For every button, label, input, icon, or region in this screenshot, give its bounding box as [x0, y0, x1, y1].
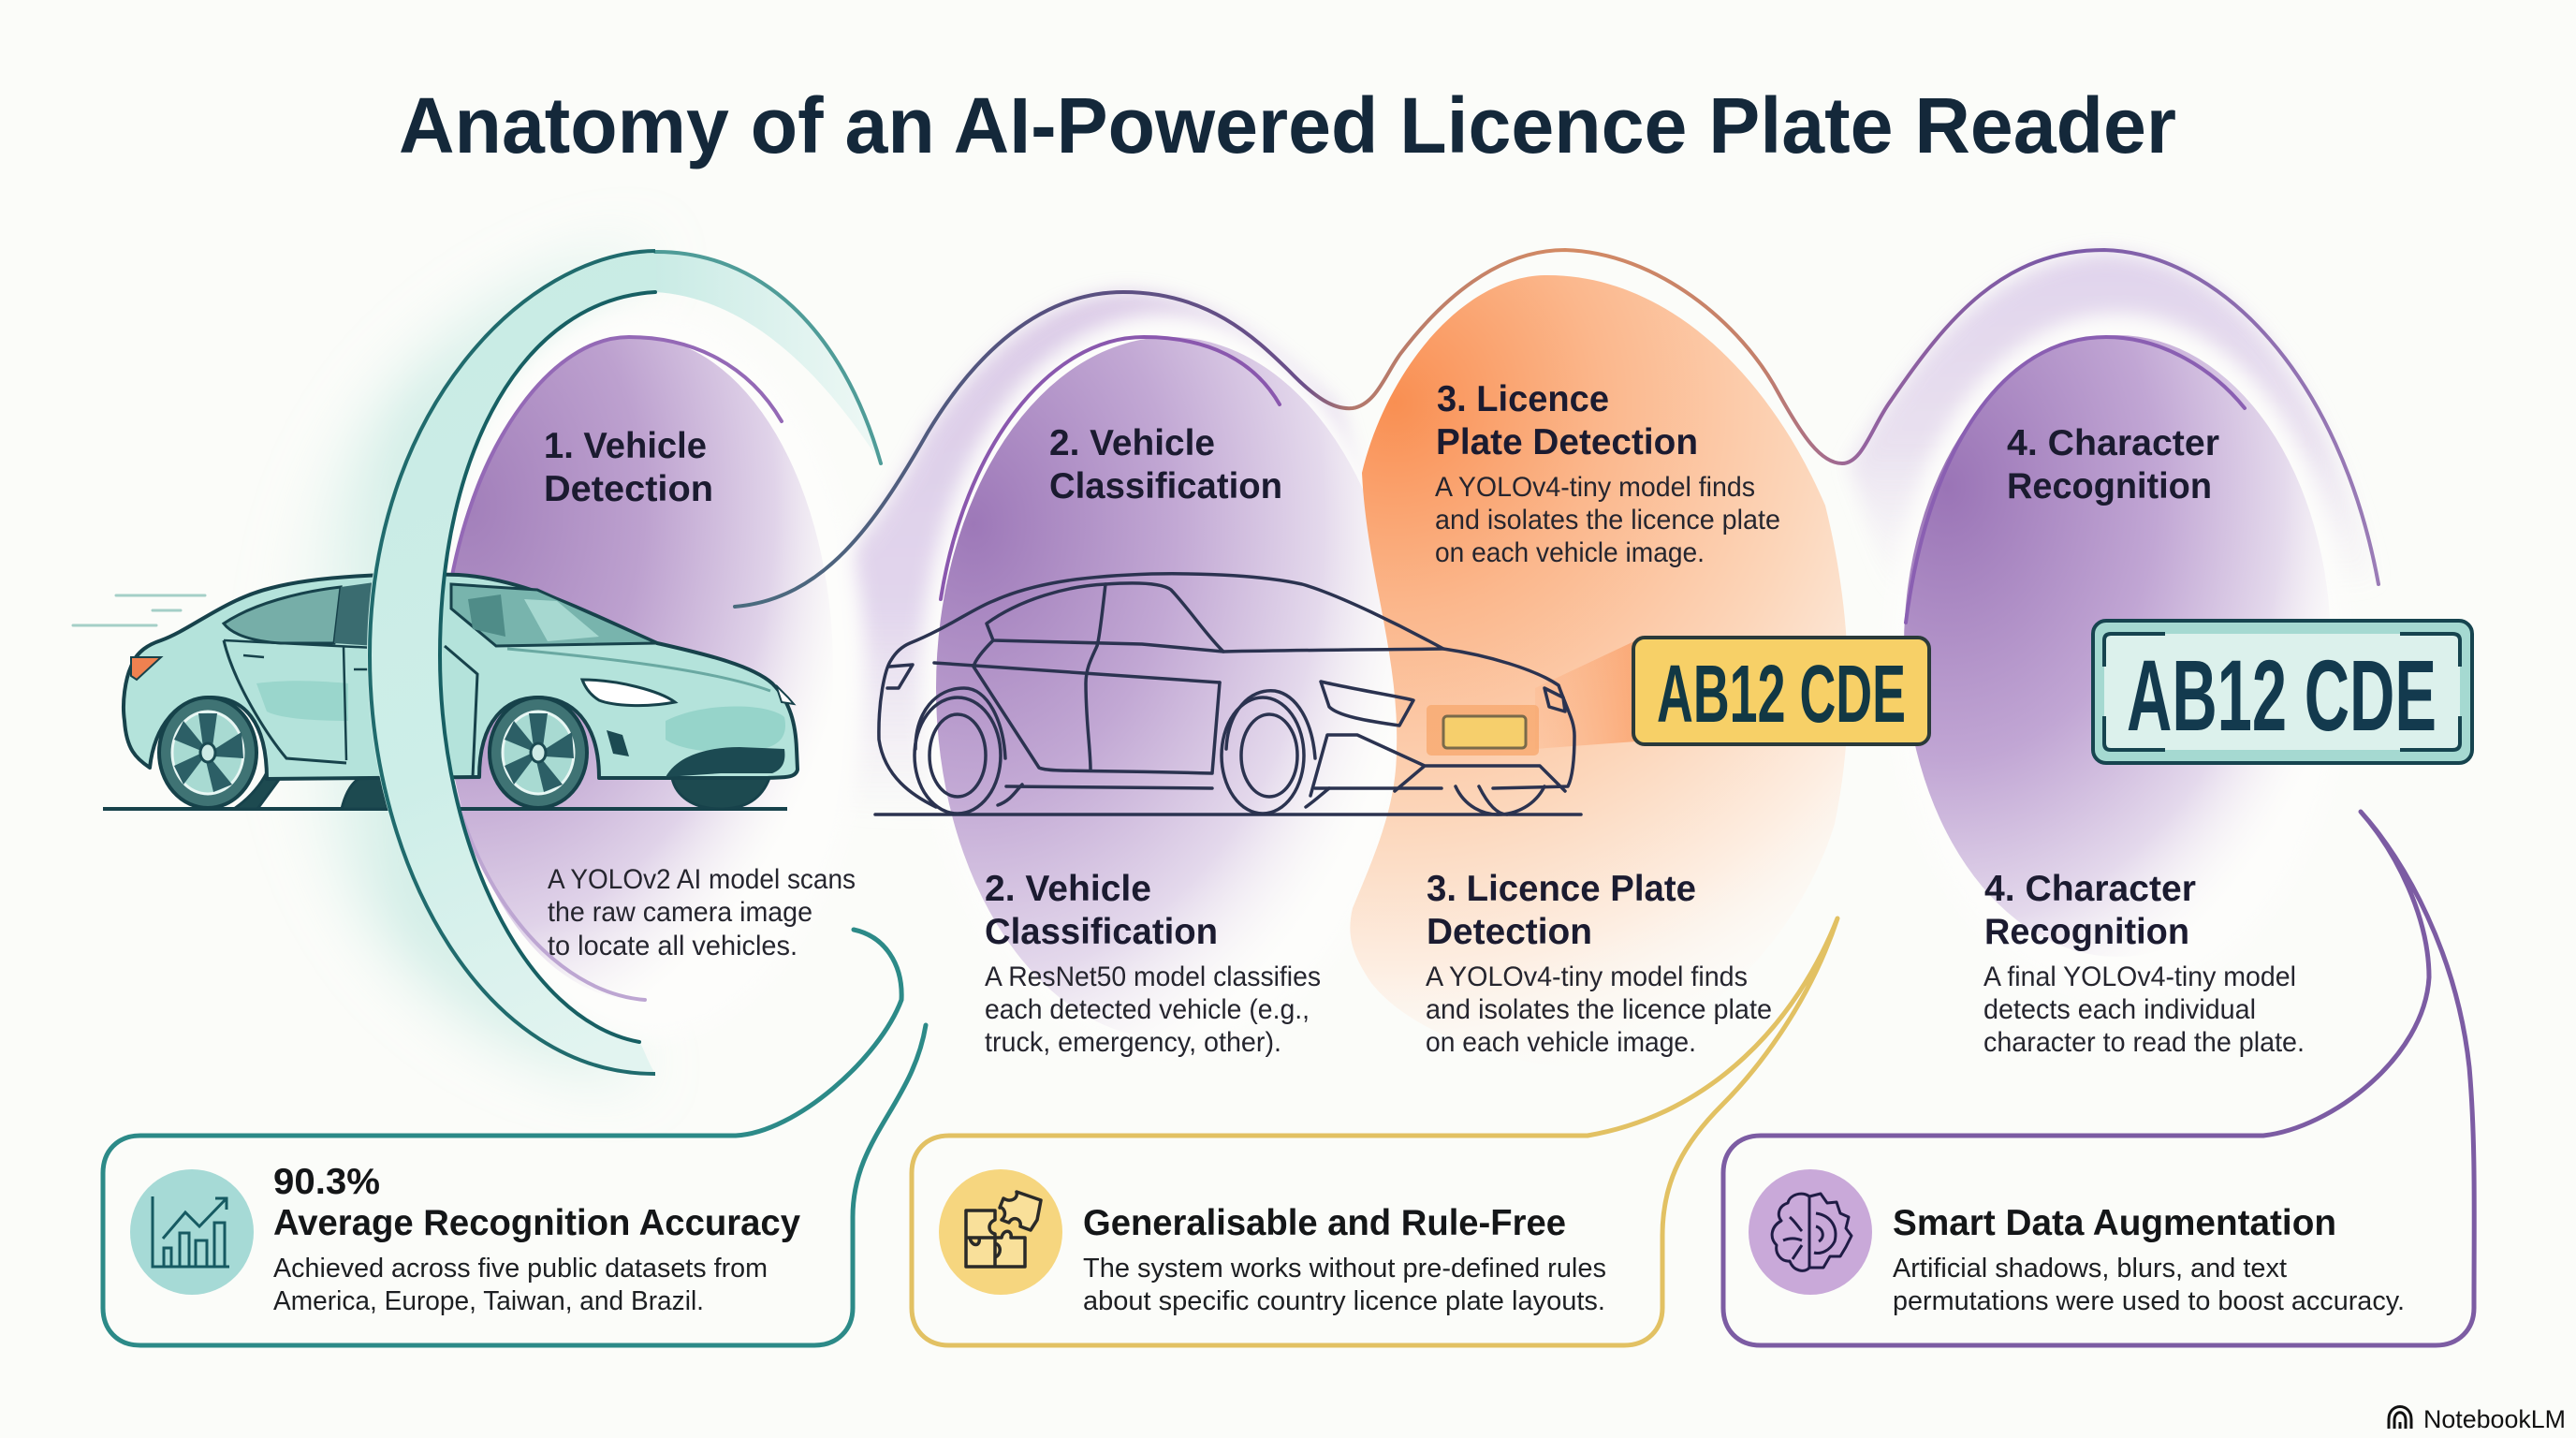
step 3 lower text: and isolates the licence plate — [1426, 994, 1772, 1025]
teal glow behind ring — [285, 253, 655, 1073]
card text: generalisable: Generalisable and Rule-Free — [1083, 1203, 1566, 1243]
step 2 lower text: 2. Vehicle — [985, 869, 1151, 909]
panel: step 3 orange shape — [1350, 275, 1848, 1067]
panel: generalisable card — [912, 918, 1837, 1345]
step 2 lower text: truck, emergency, other). — [985, 1027, 1281, 1058]
step 4 lower text: character to read the plate. — [1983, 1027, 2305, 1058]
step 2 lower text: each detected vehicle (e.g., — [985, 994, 1310, 1025]
step 1 description: to locate all vehicles. — [548, 931, 798, 961]
teal recognised licence plate — [2093, 621, 2472, 763]
step 4 upper heading: 4. Character — [2007, 423, 2219, 463]
step 1 description: A YOLOv2 AI model scans — [548, 864, 856, 895]
purple arc step 2 — [941, 337, 1280, 599]
step 2 upper heading: Classification — [1049, 466, 1282, 506]
icon: motion lines — [73, 595, 205, 625]
step 4 lower text: 4. Character — [1984, 869, 2196, 909]
panel: step 4 purple shape — [1904, 335, 2331, 957]
step 4 lower text: detects each individual — [1983, 994, 2256, 1025]
card text: generalisable — [1083, 1203, 1606, 1316]
panel: step 1 purple shape — [444, 337, 833, 1000]
step 3 lower text: A YOLOv4-tiny model finds — [1426, 961, 1748, 992]
teal ring band — [367, 251, 881, 1074]
white halo around step 2 — [920, 314, 1411, 1053]
step 4 lower text — [1983, 869, 2305, 1058]
step 3 upper text — [1435, 379, 1780, 568]
panel: outer purple blob between steps 1 and 2 — [739, 292, 1404, 843]
outline car illustration — [875, 574, 1581, 814]
step 3 upper text: 3. Licence — [1437, 379, 1609, 419]
step 4 upper heading — [2007, 423, 2219, 506]
step 2 lower text: Classification — [985, 912, 1218, 952]
card text: accuracy: Achieved across five public datasets from — [273, 1254, 768, 1284]
step 3 lower text: 3. Licence Plate — [1427, 869, 1696, 909]
purple arc step 1 — [451, 337, 782, 580]
step 4 lower text: Recognition — [1984, 912, 2189, 952]
yellow licence plate: AB12 CDE — [1657, 649, 1906, 740]
card text: generalisable: about specific country licence plate layouts. — [1083, 1286, 1605, 1316]
icon: growth chart — [130, 1169, 254, 1295]
step 2 lower text: A ResNet50 model classifies — [985, 961, 1321, 992]
step 2 lower text — [985, 869, 1321, 1058]
step 3 upper text: and isolates the licence plate — [1435, 505, 1780, 536]
card text: accuracy: Average Recognition Accuracy — [273, 1203, 800, 1243]
card text: augmentation — [1893, 1203, 2405, 1316]
step 4 lower text: A final YOLOv4-tiny model — [1983, 961, 2296, 992]
title: Anatomy of an AI-Powered Licence Plate Reader — [399, 81, 2176, 169]
step 3 lower text: Detection — [1427, 912, 1592, 952]
step 1 description — [548, 864, 856, 961]
card text: augmentation: permutations were used to boost accuracy. — [1893, 1286, 2405, 1316]
step 3 upper text: Plate Detection — [1436, 422, 1698, 462]
step 1 heading — [544, 426, 713, 509]
card text: accuracy — [273, 1162, 800, 1316]
step 2 upper heading — [1049, 423, 1282, 506]
step 1 heading: Detection — [544, 469, 713, 509]
white halo around step 1 — [426, 309, 866, 1039]
step 3 lower text — [1426, 869, 1772, 1058]
beam from car plate to yellow plate — [1535, 640, 1636, 749]
white halo around step 4 — [1888, 314, 2347, 997]
NotebookLM watermark: NotebookLM — [2423, 1405, 2566, 1433]
step 3 upper text: A YOLOv4-tiny model finds — [1435, 472, 1755, 503]
step 3 upper text: on each vehicle image. — [1435, 537, 1705, 568]
wavy top line joining the steps — [735, 250, 2378, 607]
panel: accuracy card — [103, 930, 926, 1345]
card text: augmentation: Smart Data Augmentation — [1893, 1203, 2336, 1243]
step 4 upper heading: Recognition — [2007, 466, 2212, 506]
step 1 heading: 1. Vehicle — [544, 426, 707, 466]
yellow licence plate — [1633, 638, 1929, 744]
step 1 description: the raw camera image — [548, 897, 812, 928]
card text: accuracy: 90.3% — [273, 1162, 380, 1202]
step 3 lower text: on each vehicle image. — [1426, 1027, 1696, 1058]
icon: puzzle pieces — [939, 1169, 1062, 1295]
faint lower arc step 1 — [454, 786, 645, 1000]
step 2 upper heading: 2. Vehicle — [1049, 423, 1215, 463]
card text: augmentation: Artificial shadows, blurs, and text — [1893, 1254, 2287, 1284]
card text: generalisable: The system works without pre-defined rules — [1083, 1254, 1606, 1284]
car licence plate highlight — [1427, 705, 1539, 756]
card text: accuracy: America, Europe, Taiwan, and Brazil. — [273, 1286, 704, 1316]
purple arc step 4 — [1906, 337, 2245, 623]
panel: step 2 purple shape — [936, 337, 1404, 1039]
panel: augmentation card — [1723, 812, 2474, 1345]
icon: brain and gear — [1749, 1169, 1872, 1295]
panel: outer purple blob for step 4 — [1849, 253, 2378, 618]
teal car illustration — [103, 574, 798, 809]
